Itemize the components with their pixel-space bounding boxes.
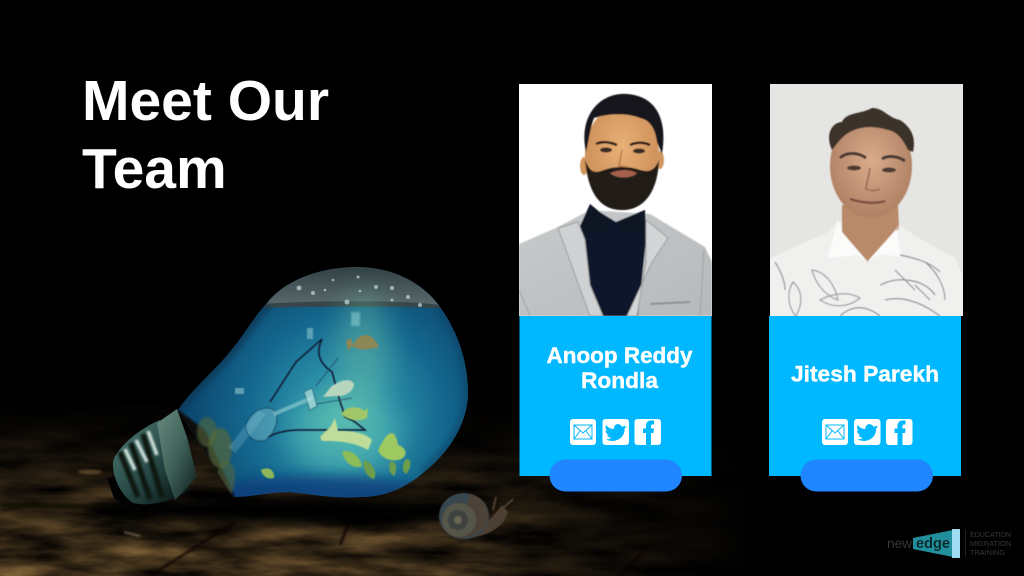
- logo tagline: MIGRATION: [970, 541, 1011, 548]
- title: Meet Our: [82, 69, 329, 133]
- team card: Anoop Reddy Rondla: [519, 84, 712, 492]
- icon: twitter: [854, 419, 880, 445]
- portrait photo: Anoop: [519, 84, 712, 316]
- portrait photo: Jitesh: [770, 84, 963, 316]
- name panel: [520, 316, 712, 476]
- logo tagline: [970, 532, 1011, 557]
- logo tagline: EDUCATION: [970, 532, 1011, 539]
- logo: newedge: [887, 529, 1011, 558]
- button pill: [550, 460, 682, 492]
- bulb shadow: [90, 496, 490, 524]
- title: Team: [82, 137, 227, 201]
- filament: [232, 339, 365, 450]
- name: Anoop Reddy Rondla: [546, 343, 693, 393]
- team card: Jitesh Parekh: [769, 84, 963, 492]
- bulb screw base: [107, 409, 197, 512]
- icon: email: [570, 419, 596, 445]
- name: Anoop Reddy Rondla: Anoop Reddy: [546, 343, 693, 368]
- icon: twitter: [602, 419, 629, 445]
- wooden ground: [0, 400, 800, 576]
- logo: newedge: new: [887, 535, 913, 551]
- name: Jitesh Parekh: Jitesh Parekh: [791, 362, 939, 386]
- button pill: [800, 460, 933, 492]
- icon: facebook: [886, 419, 912, 445]
- fish: [261, 335, 410, 479]
- icon: light bulb aquarium: [107, 260, 513, 539]
- title: [82, 69, 329, 201]
- icon: email: [822, 419, 848, 445]
- logo tagline: TRAINING: [970, 550, 1005, 557]
- snail: [439, 493, 513, 539]
- bulb glass and water: [178, 267, 468, 498]
- icon: facebook: [634, 419, 661, 445]
- name: Anoop Reddy Rondla: Rondla: [581, 368, 659, 393]
- name panel: [769, 316, 961, 476]
- logo: newedge: edge: [916, 535, 950, 552]
